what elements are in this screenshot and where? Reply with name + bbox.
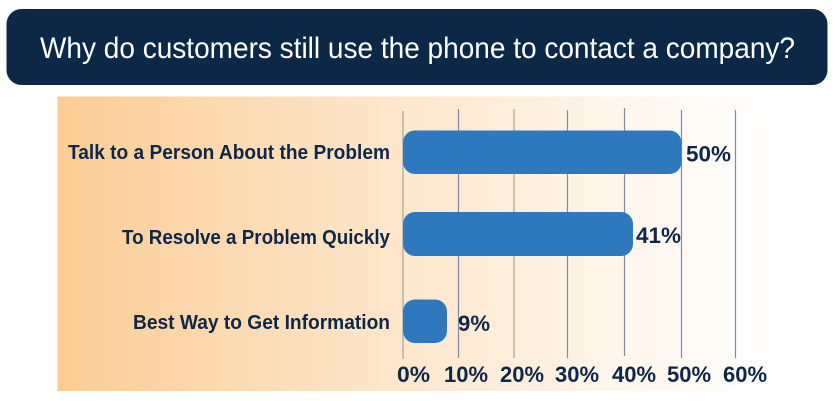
label: talk to a person: Talk to a Person About the Problem <box>68 141 390 164</box>
value: 41%: 41% <box>636 223 681 248</box>
title banner <box>6 9 828 85</box>
bar: best way to get information <box>403 300 447 343</box>
value: 50%: 50% <box>686 142 731 166</box>
title text: Why do customers still use the phone to contact a company? <box>40 32 795 65</box>
x axis labels: 20% <box>500 362 544 387</box>
label: resolve quickly: To Resolve a Problem Quickly <box>122 226 391 249</box>
panel: chart background <box>58 96 798 391</box>
value: 9%: 9% <box>458 311 490 336</box>
label: best way: Best Way to Get Information <box>133 311 390 334</box>
x axis labels: 60% <box>723 362 767 387</box>
x axis labels: 50% <box>667 362 711 387</box>
x axis labels: 40% <box>612 362 656 387</box>
bar: talk to a person <box>403 130 682 174</box>
x axis labels <box>397 362 767 387</box>
x axis labels: 10% <box>444 362 488 387</box>
x axis labels: 0% <box>397 362 430 387</box>
bar chart <box>68 108 767 387</box>
bar: resolve quickly <box>403 212 633 256</box>
x axis labels: 30% <box>555 362 599 387</box>
